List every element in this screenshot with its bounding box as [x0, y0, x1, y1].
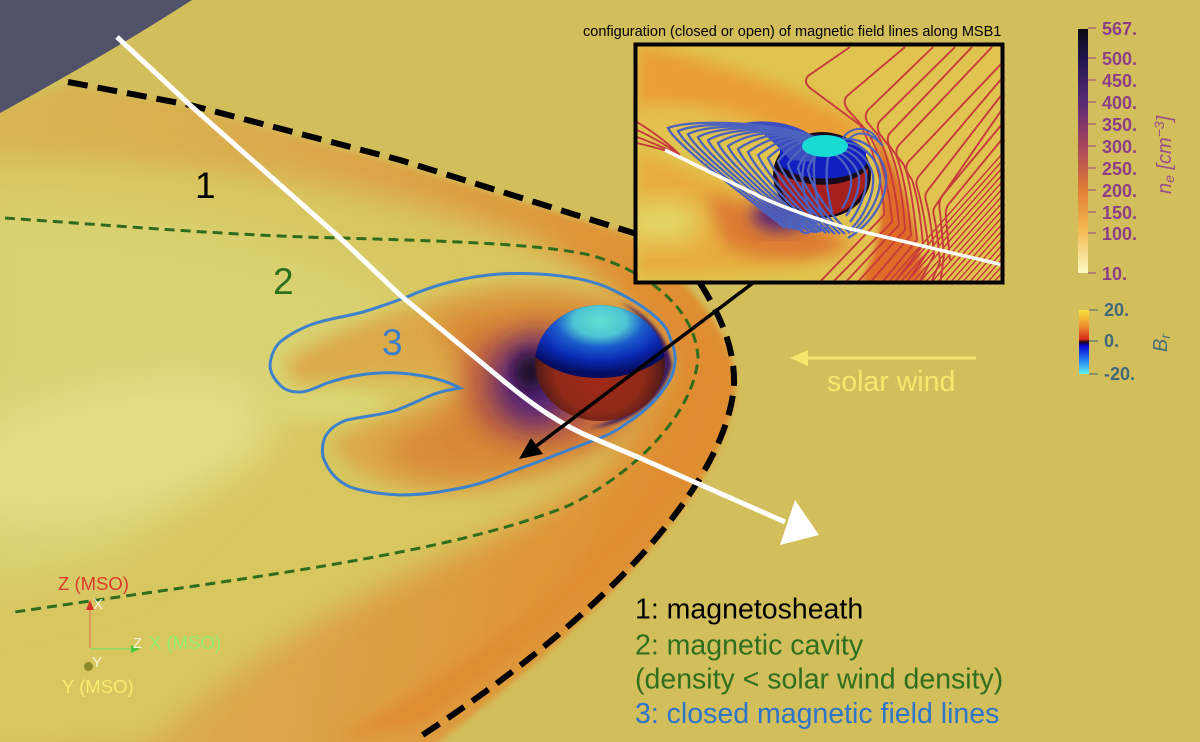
inset trajectory — [665, 150, 1003, 265]
region number 1: 1 — [195, 165, 216, 206]
solar wind arrow — [790, 350, 976, 366]
coordinate axes: X (MSO) — [149, 632, 221, 653]
region number 3: 3 — [382, 322, 403, 363]
dark region top left — [0, 0, 192, 113]
legend — [635, 594, 1003, 730]
arrowhead — [519, 438, 543, 459]
colour bar: electron density — [1078, 19, 1177, 284]
colour bar: electron density: 300. — [1102, 137, 1137, 157]
legend: 2: magnetic cavity — [635, 630, 864, 662]
upper arcs over the pole — [843, 129, 883, 146]
legend: 3: closed magnetic field lines — [635, 698, 999, 730]
coordinate axes: Y — [92, 654, 102, 671]
field axis label: B — [1150, 339, 1172, 352]
density axis label: e — [1161, 175, 1177, 183]
north pole cap — [802, 135, 848, 157]
colour bar: radial magnetic field — [1079, 300, 1173, 384]
inset planet — [773, 132, 871, 218]
colour bar: electron density: 200. — [1102, 181, 1137, 201]
planet Mercury surface magnetic field — [535, 305, 665, 421]
region number 2: 2 — [273, 261, 294, 302]
inset frame — [636, 44, 1002, 282]
colour bar: electron density: 10. — [1102, 264, 1127, 284]
colour bar: radial magnetic field: 0. — [1104, 331, 1119, 351]
solar wind label: solar wind — [827, 366, 955, 398]
inset panel: magnetic field line configuration — [622, 43, 1003, 285]
colour bar: radial magnetic field: 20. — [1104, 300, 1129, 320]
density axis label: ] — [1154, 115, 1176, 123]
coordinate axes: X — [93, 596, 103, 613]
colour bar: radial magnetic field: -20. — [1104, 364, 1135, 384]
density axis label: n — [1154, 183, 1176, 194]
coordinate axes: Z (MSO) — [58, 573, 129, 594]
background density map — [0, 88, 738, 742]
closed field lines — [668, 121, 886, 238]
inset title: configuration (closed or open) of magnetic field lines along MSB1 — [583, 24, 1001, 40]
colour bar: electron density: 400. — [1102, 93, 1137, 113]
coordinate axes: Y (MSO) — [62, 676, 134, 697]
coordinate axes — [58, 573, 221, 697]
open field lines — [637, 47, 1003, 285]
colour bar: electron density: 250. — [1102, 159, 1137, 179]
trajectory arrowhead — [780, 500, 819, 545]
colour bar: electron density: 150. — [1102, 203, 1137, 223]
spacecraft trajectory MSB1 — [117, 37, 819, 545]
magnetic cavity dotted boundary — [5, 218, 698, 612]
legend: (density < solar wind density) — [635, 664, 1003, 696]
bow shock dashed line — [68, 82, 734, 738]
closed field line contour — [270, 274, 675, 495]
colour bar: electron density: 100. — [1102, 224, 1137, 244]
density plume around planet — [285, 285, 675, 491]
colour bar: electron density: 450. — [1102, 71, 1137, 91]
density axis label: [cm — [1154, 137, 1176, 175]
colour bar: electron density: 500. — [1102, 49, 1137, 69]
density axis label: −3 — [1151, 121, 1167, 137]
coordinate axes: Z — [133, 635, 142, 652]
colour bar: electron density: 567. — [1102, 19, 1137, 39]
field axis label: r — [1157, 333, 1173, 339]
black arrow from inset to cavity — [519, 283, 753, 459]
colour bar: electron density: 350. — [1102, 115, 1137, 135]
legend: 1: magnetosheath — [635, 594, 863, 626]
